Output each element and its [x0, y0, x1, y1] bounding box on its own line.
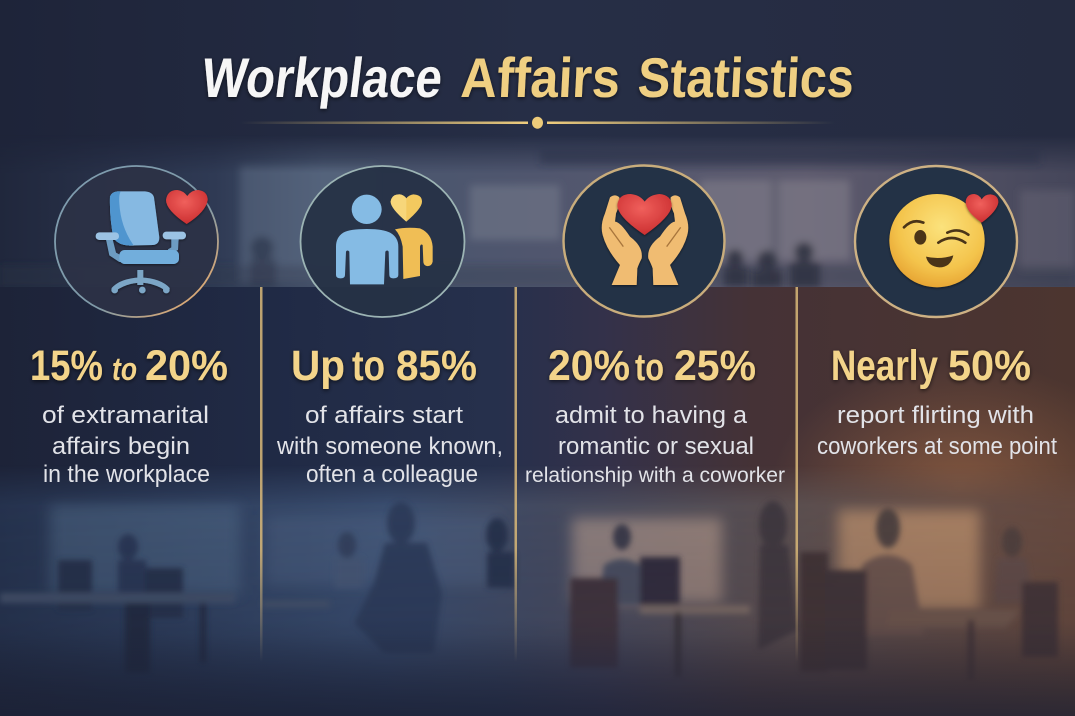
- stat: 15% to 20%: 15%: [30, 342, 103, 390]
- icon: red heart: [166, 190, 208, 224]
- title: Workplace: [199, 46, 446, 109]
- silhouettes, panel 4: [876, 508, 900, 548]
- silhouettes, panel 3: [613, 524, 631, 550]
- stat: nearly 50%: Nearly: [831, 342, 938, 390]
- description 2: of affairs start: [305, 402, 463, 429]
- stat: up to 85%: to: [352, 342, 385, 390]
- description 1: in the workplace: [43, 461, 210, 488]
- description 2: [276, 402, 503, 488]
- description 3: romantic or sexual: [558, 433, 754, 460]
- title: Statistics: [636, 46, 856, 109]
- stat: 20% to 25%: to: [635, 347, 664, 389]
- title rule with dot: [240, 117, 835, 129]
- stat: 20% to 25%: 25%: [674, 342, 756, 390]
- column dividers: [260, 287, 798, 662]
- description 4: report flirting with: [837, 402, 1034, 429]
- bottom vignette: [0, 620, 1075, 716]
- icon: two people with heart: [300, 166, 464, 317]
- stat: nearly 50%: 50%: [948, 342, 1031, 390]
- description 4: coworkers at some point: [817, 433, 1057, 460]
- icon: hands holding heart: [564, 166, 724, 316]
- description 4: [817, 402, 1057, 460]
- silhouettes, panel 1: [118, 534, 138, 560]
- description 3: [525, 402, 785, 487]
- stat: 15% to 20%: 20%: [145, 342, 228, 390]
- lower panel backdrop: [0, 287, 1075, 716]
- description 3: relationship with a coworker: [525, 463, 785, 487]
- blurred office scene at bottom: [0, 474, 1075, 681]
- stat: 15% to 20%: [30, 342, 228, 488]
- stat: 15% to 20%: to: [112, 351, 137, 387]
- stat: up to 85%: Up: [291, 342, 345, 390]
- left hand: [602, 195, 642, 285]
- description 1: [42, 402, 210, 488]
- title: [199, 46, 856, 109]
- warm glow right: [770, 360, 1075, 620]
- stat: up to 85%: [276, 342, 503, 488]
- description 3: admit to having a: [555, 402, 748, 429]
- blurred office band behind icons: [0, 135, 1075, 288]
- description 1: affairs begin: [52, 433, 190, 460]
- stat: up to 85%: 85%: [396, 342, 477, 390]
- right hand: [648, 195, 688, 285]
- description 2: often a colleague: [306, 461, 478, 488]
- icon: winking face with heart: [855, 166, 1017, 317]
- description 2: with someone known,: [276, 433, 503, 460]
- stat: nearly 50%: [817, 342, 1057, 460]
- silhouettes, panel 2: [387, 502, 415, 544]
- stat: 20% to 25%: [525, 342, 785, 487]
- icon: office chair with heart: [55, 166, 218, 317]
- title: Affairs: [459, 46, 622, 109]
- stat: 20% to 25%: 20%: [548, 342, 630, 390]
- heart: [617, 194, 672, 235]
- description 1: of extramarital: [42, 402, 209, 429]
